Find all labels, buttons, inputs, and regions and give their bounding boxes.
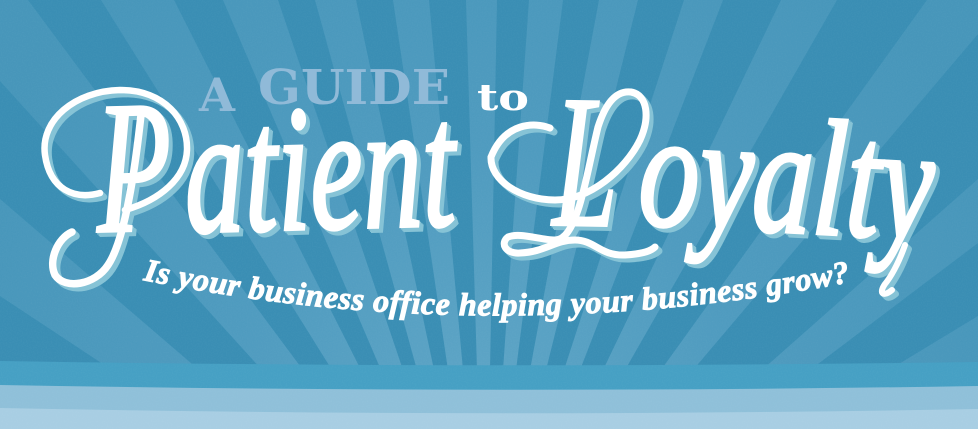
stage bands — [0, 361, 978, 429]
word: Loyalty — [491, 57, 939, 294]
word: Loyalty: L — [550, 57, 620, 268]
word: Patient: P — [92, 61, 175, 273]
flourish: y tail — [882, 245, 905, 294]
band: teal strip — [0, 361, 978, 429]
word: Patient — [45, 61, 460, 284]
heading: to: to — [477, 77, 529, 119]
flourish: L swash — [491, 92, 655, 255]
word: Loyalty: oyalty — [635, 78, 939, 276]
flourish: P tail — [53, 115, 141, 284]
band: pale strip — [0, 385, 978, 429]
word: Patient: atient — [182, 64, 460, 271]
subtitle: Is your business office helping your business grow? — [142, 260, 847, 323]
heading: A GUIDE — [198, 60, 450, 122]
band: palest strip — [0, 408, 978, 429]
flourish: P swash — [45, 90, 187, 210]
title: Patient Loyalty — [45, 57, 939, 294]
heading: A GUIDE: A — [198, 68, 236, 122]
subtitle arc guide — [143, 280, 850, 316]
heading: A GUIDE: GUIDE — [258, 60, 450, 116]
